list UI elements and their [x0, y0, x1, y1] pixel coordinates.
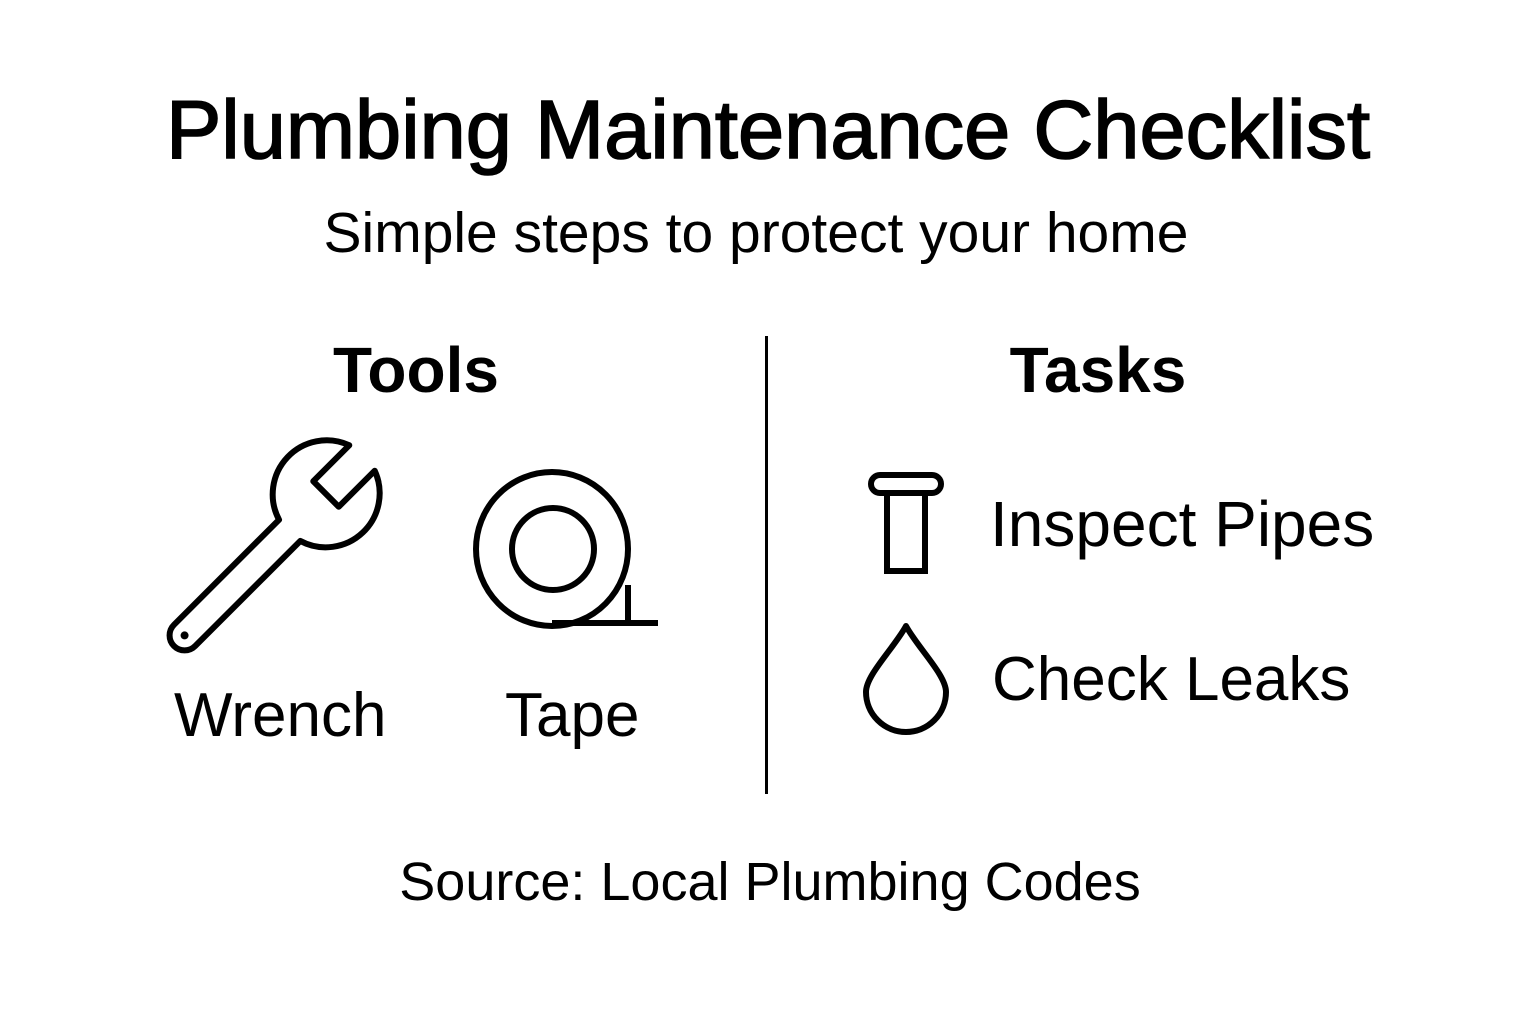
heading: tools: Tools	[333, 334, 499, 406]
label: wrench: Wrench	[174, 681, 386, 750]
source: Source: Local Plumbing Codes	[399, 852, 1141, 912]
subtitle: Simple steps to protect your home	[324, 201, 1188, 265]
task: inspect pipes: Inspect Pipes	[990, 488, 1374, 560]
heading: tasks: Tasks	[1010, 334, 1186, 406]
divider	[765, 336, 768, 794]
label: tape: Tape	[505, 681, 639, 750]
title: Plumbing Maintenance Checklist	[166, 83, 1370, 176]
task: check leaks: Check Leaks	[992, 645, 1350, 714]
